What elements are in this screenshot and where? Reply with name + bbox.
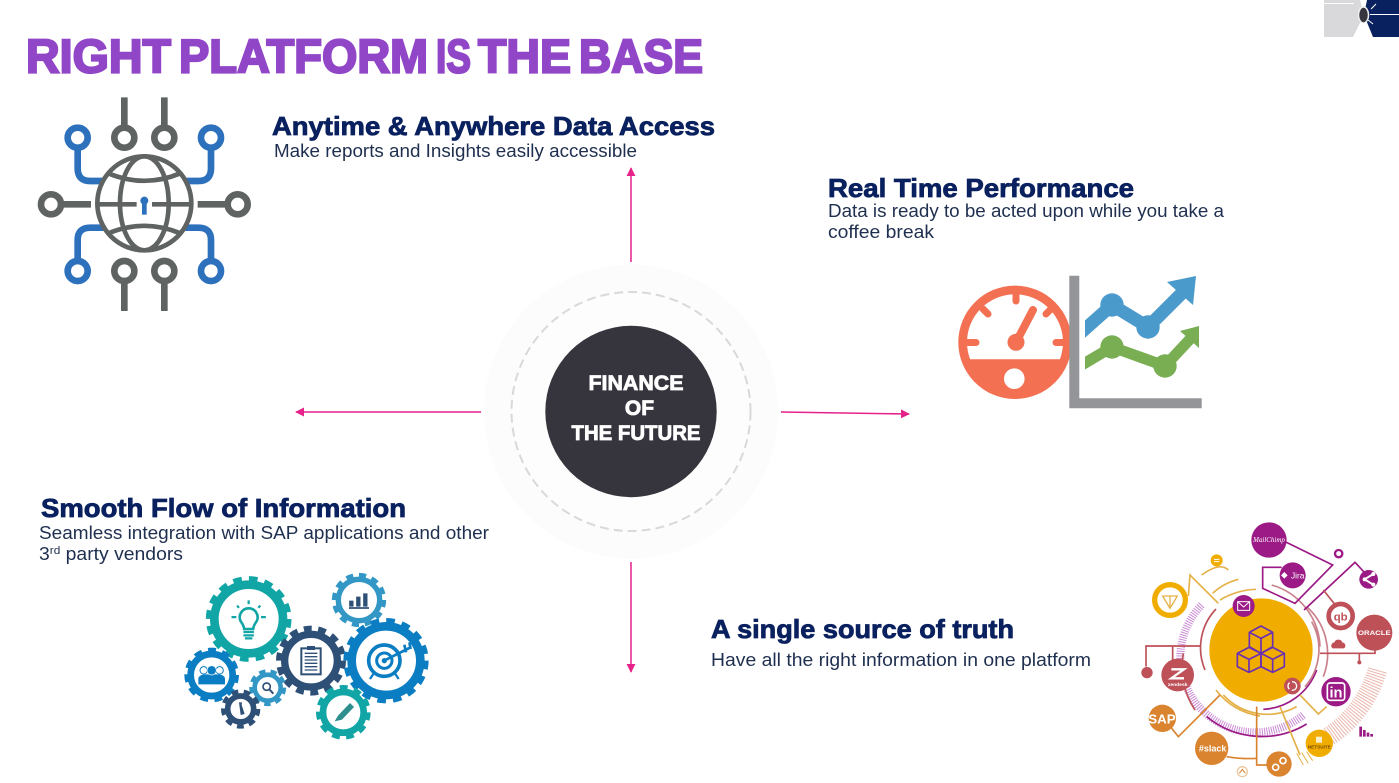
mail xyxy=(1233,595,1255,617)
up symbol xyxy=(1237,767,1247,777)
gear: bar chart xyxy=(334,575,384,625)
yellow ring xyxy=(1155,585,1185,615)
arrow: left xyxy=(296,411,481,413)
gauge xyxy=(958,286,1072,399)
heading: real time performance: Real Time Performance xyxy=(828,173,1134,203)
arrow: up xyxy=(630,168,632,262)
chat bubble xyxy=(1211,554,1223,566)
central hub: finance of the future xyxy=(484,264,778,558)
heading: single source of truth: A single source of truth xyxy=(711,614,1014,644)
green trend line xyxy=(1075,326,1199,378)
icon: speedometer and line charts xyxy=(958,276,1202,403)
center circle xyxy=(1209,598,1313,702)
title: IS xyxy=(436,30,471,82)
heading: anytime and anywhere: Anytime & Anywhere Data Access xyxy=(272,111,715,141)
text: smooth flow description: Seamless integration with SAP applications and other xyxy=(39,523,489,543)
jira: Jira xyxy=(1291,570,1305,580)
oracle xyxy=(1356,615,1392,651)
bars xyxy=(1361,727,1372,737)
icon: globe with lock and network nodes xyxy=(41,97,248,311)
small cog xyxy=(1335,550,1342,557)
text: smooth flow description: 3 xyxy=(39,544,49,564)
icon: integrations wheel xyxy=(1141,522,1392,777)
blue trend line xyxy=(1075,276,1196,339)
cubes xyxy=(1237,626,1284,672)
gear: target xyxy=(346,621,426,701)
arrow: down xyxy=(630,562,632,672)
icon: cluster of gears xyxy=(187,575,426,737)
gear: clipboard xyxy=(279,628,343,693)
quickbooks xyxy=(1329,604,1353,628)
connector arcs and lines xyxy=(1146,542,1377,765)
gear: people xyxy=(187,650,237,700)
text: real time description: coffee break xyxy=(828,222,935,242)
oracle: ORACLE xyxy=(1358,630,1391,637)
central hub: finance of the future: THE FUTURE xyxy=(572,422,700,445)
gear: light bulb xyxy=(209,579,289,659)
quickbooks: qb xyxy=(1334,611,1348,623)
text: real time description: Data is ready to be acted upon while you take a xyxy=(828,201,1225,221)
gear: pencil xyxy=(318,687,368,737)
title: PLATFORM xyxy=(179,30,428,82)
sap xyxy=(1148,705,1176,732)
small dot xyxy=(1357,660,1361,664)
heading: smooth flow: Smooth Flow of Information xyxy=(41,493,406,523)
mailchimp xyxy=(1251,522,1287,558)
text: single source description: Have all the right information in one platform xyxy=(711,650,1091,670)
linkedin: in xyxy=(1329,686,1343,702)
text: smooth flow description: rd xyxy=(50,545,60,557)
mailchimp: MailChimp xyxy=(1252,536,1285,544)
share xyxy=(1359,570,1378,589)
text: anytime description: Make reports and Insights easily accessible xyxy=(274,141,637,161)
gear: tie xyxy=(223,691,258,727)
title: BASE xyxy=(579,30,703,82)
title: THE xyxy=(478,30,571,82)
gear: magnifier xyxy=(251,671,284,704)
jira xyxy=(1280,562,1306,588)
automation xyxy=(1266,751,1292,777)
slack: #slack xyxy=(1199,743,1226,753)
zendesk xyxy=(1161,659,1194,691)
central hub: finance of the future: FINANCE xyxy=(588,372,684,395)
cloud xyxy=(1331,640,1345,648)
central hub: finance of the future: OF xyxy=(625,397,654,420)
sap: SAP xyxy=(1148,711,1176,726)
text: real time description xyxy=(828,201,1225,242)
slack xyxy=(1195,732,1228,765)
linkedin xyxy=(1321,677,1351,706)
arrow: right xyxy=(781,412,909,414)
sync xyxy=(1284,678,1301,694)
netsuite xyxy=(1306,730,1333,757)
text: smooth flow description xyxy=(39,523,489,564)
netsuite: NETSUITE xyxy=(1308,745,1331,750)
title xyxy=(26,30,703,82)
zendesk: zendesk xyxy=(1168,682,1188,688)
chart axes xyxy=(1074,276,1202,403)
title: RIGHT xyxy=(26,30,171,82)
pin xyxy=(1141,667,1153,678)
text: smooth flow description: party vendors xyxy=(60,544,183,564)
logo: top right corner xyxy=(1324,0,1399,37)
